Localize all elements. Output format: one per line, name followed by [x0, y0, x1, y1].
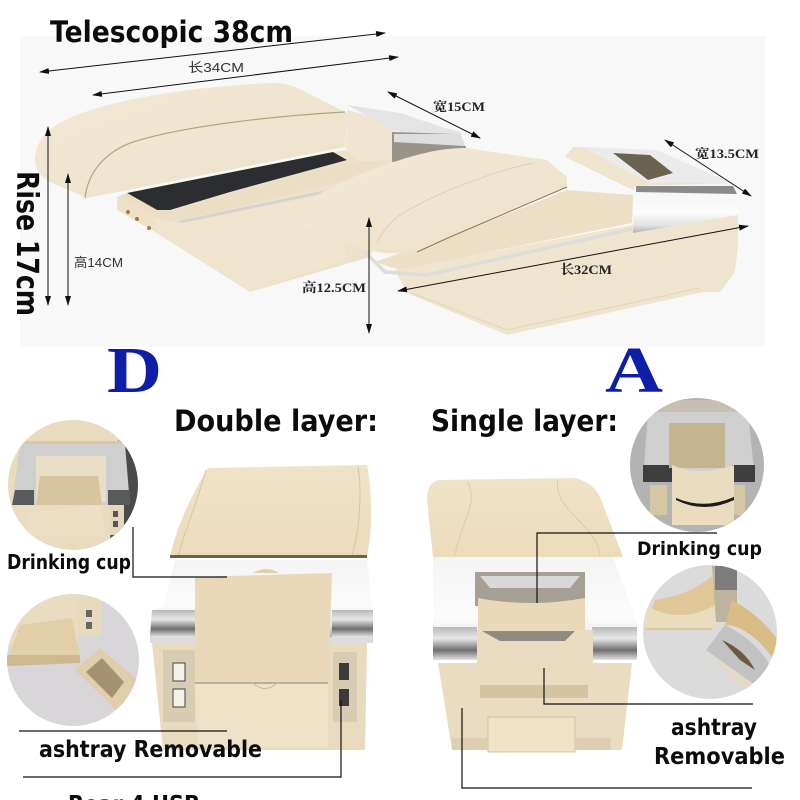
photo circle: single layer drinking cup [630, 398, 764, 532]
label: drinking cup, single layer: Drinking cup [637, 538, 762, 560]
heading: model A: A [605, 334, 663, 407]
product photo: double layer armrest, side view [35, 83, 466, 292]
callout line: double layer ashtray [19, 730, 227, 732]
label: width 15cm: 宽15CM [433, 99, 485, 114]
label: ashtray removable, double layer: ashtray Removable [39, 737, 262, 763]
arrow: rise height [47, 127, 49, 305]
label: removable, single layer: Removable [654, 744, 785, 770]
callout line: double layer drinking cup [133, 527, 227, 577]
label: width 13.5cm: 宽13.5CM [695, 146, 759, 161]
product photo: single layer armrest, side view [288, 147, 738, 335]
label: drinking cup, double layer: Drinking cup [7, 550, 131, 574]
heading: model D: D [107, 334, 162, 407]
arrow: telescopic length [40, 33, 385, 72]
heading: double layer: Double layer: [174, 404, 378, 438]
callout line: single layer ashtray [544, 668, 753, 704]
label: length 34cm: 长34CM [188, 60, 244, 75]
label: ashtray, single layer: ashtray [671, 715, 757, 741]
product photo: double layer armrest, front view [150, 465, 373, 750]
arrow: height 12.5cm [368, 218, 370, 333]
callout line: single layer bottom [462, 708, 752, 788]
photo circle: single layer removable cup and ashtray [643, 565, 778, 699]
callout line: single layer drinking cup [537, 533, 717, 603]
label: height 12.5cm: 高12.5CM [302, 280, 366, 295]
arrow: width 15cm [388, 92, 480, 138]
heading: single layer: Single layer: [431, 404, 618, 438]
arrow: height 14cm [67, 174, 69, 305]
arrow: length 32cm [398, 226, 748, 291]
label: rise 17cm: Rise 17cm [9, 171, 44, 316]
label: length 32cm: 长32CM [560, 262, 612, 277]
photo circle: double layer drinking cup [8, 420, 140, 550]
arrow: width 13.5cm [665, 140, 751, 196]
product photo: single layer armrest, front view [427, 478, 637, 752]
photo circle: double layer removable tray [6, 594, 140, 726]
label: height 14cm: 高14CM [74, 255, 123, 270]
arrow: length 34cm [93, 57, 398, 95]
callout line: double layer USB [23, 700, 341, 777]
panel: dimensions photo background [20, 36, 765, 347]
title: telescopic length: Telescopic 38cm [50, 15, 293, 49]
